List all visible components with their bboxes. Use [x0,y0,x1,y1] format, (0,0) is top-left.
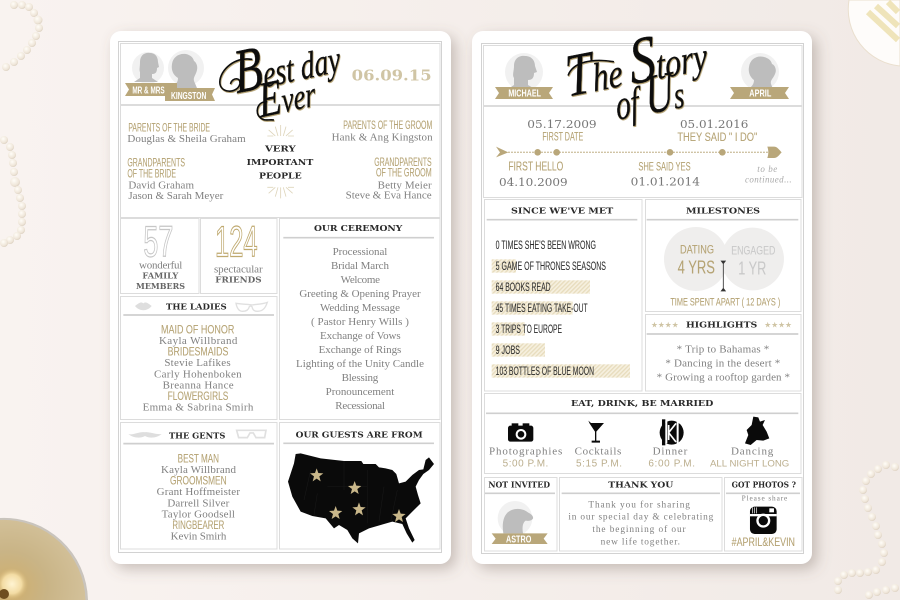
portrait: April: APRIL [749,88,771,99]
heading: the ladies: THE LADIES [166,303,227,313]
parents of the bride [127,120,246,145]
thank you message: the beginning of our [592,524,687,535]
number 124: 124 [215,217,258,266]
stars right: ★★★★ [764,320,792,329]
bar chart: statistics: 45 TIMES EATING TAKE-OUT [496,302,588,315]
venn: dating: DATING [680,243,714,257]
bridal party list: MAID OF HONOR [161,322,235,336]
schedule: cocktails: Cocktails [575,445,621,457]
schedule: dinner: Dinner [653,445,688,457]
schedule: dancing: ALL NIGHT LONG [710,458,789,468]
please share: Please share [742,494,787,503]
decoration: plate with gold clips [848,0,900,66]
panel: friends count: spectacular [214,263,263,275]
left card: Best Day Ever [110,16,451,564]
panel: thank you [560,478,722,551]
to be continued: to be [757,164,777,174]
bridal party list: Stevie Lafikes [164,357,231,369]
panel: our ceremony [280,218,440,420]
grandparents of the groom: OF THE GROOM [376,166,432,180]
panel: family count: MEMBERS [136,282,185,292]
ceremony program list: Wedding Message [320,302,400,314]
heading: EAT, DRINK, BE MARRIED [571,399,714,409]
arrow: time apart [721,261,725,291]
schedule: dinner: 6:00 P.M. [648,458,695,469]
ceremony program list: Recessional [335,400,385,412]
schedule: cocktails [575,445,622,469]
portrait: Michael [495,53,553,99]
groomsmen list: RINGBEARER [172,518,225,532]
title: Best day Ever: Best day [230,16,344,108]
ceremony program list: Welcome [341,274,380,286]
highlights list [657,343,790,383]
very important people heading: VERY [264,145,297,155]
icon: dog Astro: ASTRO [506,535,532,546]
heading: NOT INVITED [488,479,550,489]
heading: the gents: THE GENTS [169,431,225,441]
groomsmen list: Darrell Silver [167,497,230,509]
ribbon: Mr & Mrs: MR & MRS [132,85,165,96]
map: united states [288,453,434,543]
groomsmen list: Taylor Goodsell [162,508,235,520]
title: Best day Ever: Ever [254,61,318,128]
bar chart: statistics: 64 BOOKS READ [496,281,551,294]
groomsmen list [157,451,240,543]
ceremony program list: ( Pastor Henry Wills ) [311,316,409,328]
thank you message [568,499,714,547]
panel: our guests are from [280,422,440,549]
panel: the ladies [120,296,277,420]
highlights list: * Dancing in the desert * [665,357,780,369]
grandparents of the bride: GRANDPARENTS [127,156,185,170]
stars left: ★★★★ [651,320,679,329]
icon: sunburst top [267,125,294,136]
date: 06.09.15 [352,67,432,85]
grandparents of the groom: Betty Meier [378,179,432,191]
groomsmen list: Kayla Willbrand [161,464,236,476]
ribbon: Kingston [165,88,215,102]
she said yes: SHE SAID YES [638,160,691,174]
to be continued [745,164,792,185]
panel: friends count: FRIENDS [215,276,262,286]
they said I do [677,117,757,144]
panel: the gents [120,422,277,549]
timeline arrow [496,147,782,158]
decoration: pearl strand top left [2,1,43,71]
ceremony program list: Lighting of the Unity Candle [296,358,424,370]
ceremony program list: Greeting & Opening Prayer [299,288,421,300]
grandparents of the bride: David Graham [128,180,194,192]
schedule: photographies: Photographies [489,445,562,457]
bar chart: statistics: 9 JOBS [496,344,520,357]
panel: header [484,46,802,106]
ceremony program list: Exchange of Vows [320,330,401,342]
she said yes [631,160,700,188]
bar chart: statistics: 3 TRIPS TO EUROPE [496,323,562,336]
panel: friends count [200,217,277,294]
number 57: 57 [143,217,173,266]
groomsmen list: Kevin Smirh [171,531,227,543]
first date [527,117,597,143]
portrait: April [730,53,789,99]
thank you message: new life together. [601,536,680,547]
parents of the groom: PARENTS OF THE GROOM [343,118,432,132]
parents of the bride: Douglas & Sheila Graham [127,133,246,145]
ribbon: Mr & Mrs [125,83,177,96]
icon: instagram [750,507,777,534]
she said yes: 01.01.2014 [631,174,700,188]
to be continued: continued... [745,175,792,185]
panel: highlights [646,314,801,391]
grandparents of the bride: OF THE BRIDE [127,166,176,180]
groomsmen list: GROOMSMEN [170,474,227,488]
bar chart: statistics: 0 TIMES SHE'S BEEN WRONG [496,239,596,252]
very important people heading [247,145,314,182]
ceremony program list: Pronouncement [326,386,394,398]
ribbon: Kingston: KINGSTON [171,91,206,102]
grandparents of the groom: GRANDPARENTS [374,155,432,169]
panel: header [120,44,440,104]
decoration: pearl strand left [0,136,26,247]
schedule: cocktails: 5:15 P.M. [576,458,622,469]
bridal party list: Emma & Sabrina Smirh [143,402,254,414]
icon: dinner plate and cutlery [660,419,684,445]
they said I do: THEY SAID " I DO" [677,130,757,144]
groomsmen list: Grant Hoffmeister [157,486,240,498]
panel: not invited [484,478,557,551]
parents of the groom: Hank & Ang Kingston [332,132,433,144]
venn: engaged [721,228,784,290]
icon: moustache [128,432,162,438]
right card: The Story of Us [472,12,812,564]
first hello: FIRST HELLO [508,160,563,174]
bridal party list [143,322,254,414]
time spent apart: TIME SPENT APART ( 12 DAYS ) [670,296,780,308]
icon: lips [135,303,152,310]
map stars [310,468,406,522]
grandparents of the bride [127,156,224,202]
they said I do: 05.01.2016 [680,117,748,131]
panel: family count [120,217,199,294]
icon: camera [508,423,533,442]
parents of the groom [332,118,433,144]
bridal party list: FLOWERGIRLS [168,389,228,403]
icon: cat-eye glasses [236,302,267,311]
schedule: dancing [710,445,789,468]
heading: GOT PHOTOS ? [732,480,796,490]
schedule: dinner [648,445,695,469]
first date: 05.17.2009 [527,117,597,131]
ceremony program list: Bridal March [331,260,389,272]
bridal party list: Carly Hohenboken [154,368,242,380]
heading: our guests are from: OUR GUESTS ARE FROM [296,430,423,440]
bridal party list: Kayla Willbrand [159,335,238,347]
panel: eat, drink, be married [484,394,801,474]
heading: SINCE WE'VE MET [511,207,614,217]
ceremony program list [296,246,424,412]
decoration: gold bowl [0,518,88,600]
title: The Story of Us: The Story [562,12,710,112]
very important people heading: PEOPLE [259,172,302,182]
icon: cocktail [588,421,604,443]
bridal party list: BRIDESMAIDS [168,344,228,358]
portrait: Michael: MICHAEL [508,88,541,99]
bar chart: statistics: 103 BOTTLES OF BLUE MOON [496,365,594,378]
thank you message: Thank you for sharing [588,499,690,510]
very important people heading: IMPORTANT [247,158,314,168]
panel: very important people [120,106,440,218]
bar chart: statistics [492,239,630,378]
groomsmen list: BEST MAN [178,451,219,465]
heading: THANK YOU [608,480,674,490]
venn: dating: 4 YRS [678,257,715,278]
title: Best day Ever [220,16,344,128]
grandparents of the groom: Steve & Eva Hance [346,189,432,201]
icon: couple portraits [132,50,204,88]
icon: glasses [237,430,266,438]
ceremony program list: Blessing [342,372,379,384]
panel: since we've met [484,200,642,391]
ceremony program list: Exchange of Rings [319,344,401,356]
venn: engaged: 1 YR [738,257,766,278]
venn: dating [664,227,728,291]
bar chart: statistics: 5 GAME OF THRONES SEASONS [496,260,606,273]
parents of the bride: PARENTS OF THE BRIDE [128,120,210,134]
panel: milestones [646,200,801,312]
first hello [499,160,568,189]
first hello: 04.10.2009 [499,175,568,189]
thank you message: in our special day & celebrating [568,513,714,523]
panel: got photos [724,478,802,551]
bridal party list: Breanna Hance [163,380,234,392]
venn: engaged: ENGAGED [731,243,776,257]
heading: MILESTONES [686,207,760,217]
first date: FIRST DATE [542,129,583,143]
schedule: photographies: 5:00 P.M. [503,458,548,469]
ceremony program list: Processional [333,246,387,258]
heading: our ceremony: OUR CEREMONY [314,224,403,234]
highlights list: * Trip to Bahamas * [677,343,769,355]
grandparents of the bride: Jason & Sarah Meyer [128,190,224,202]
heading: HIGHLIGHTS [686,321,757,331]
panel: timeline [484,106,802,198]
icon: sunburst bottom [267,187,294,198]
highlights list: * Growing a rooftop garden * [657,371,790,383]
title: The Story of Us: of Us [612,58,687,133]
hashtag: #APRIL&KEVIN [732,535,795,549]
panel: family count: wonderful [139,259,182,271]
schedule: photographies [489,445,562,469]
decoration: pearl strand right [834,461,899,599]
panel: family count: FAMILY [142,272,179,282]
grandparents of the groom [346,155,432,201]
icon: dancers [745,417,769,445]
schedule: dancing: Dancing [731,445,774,457]
